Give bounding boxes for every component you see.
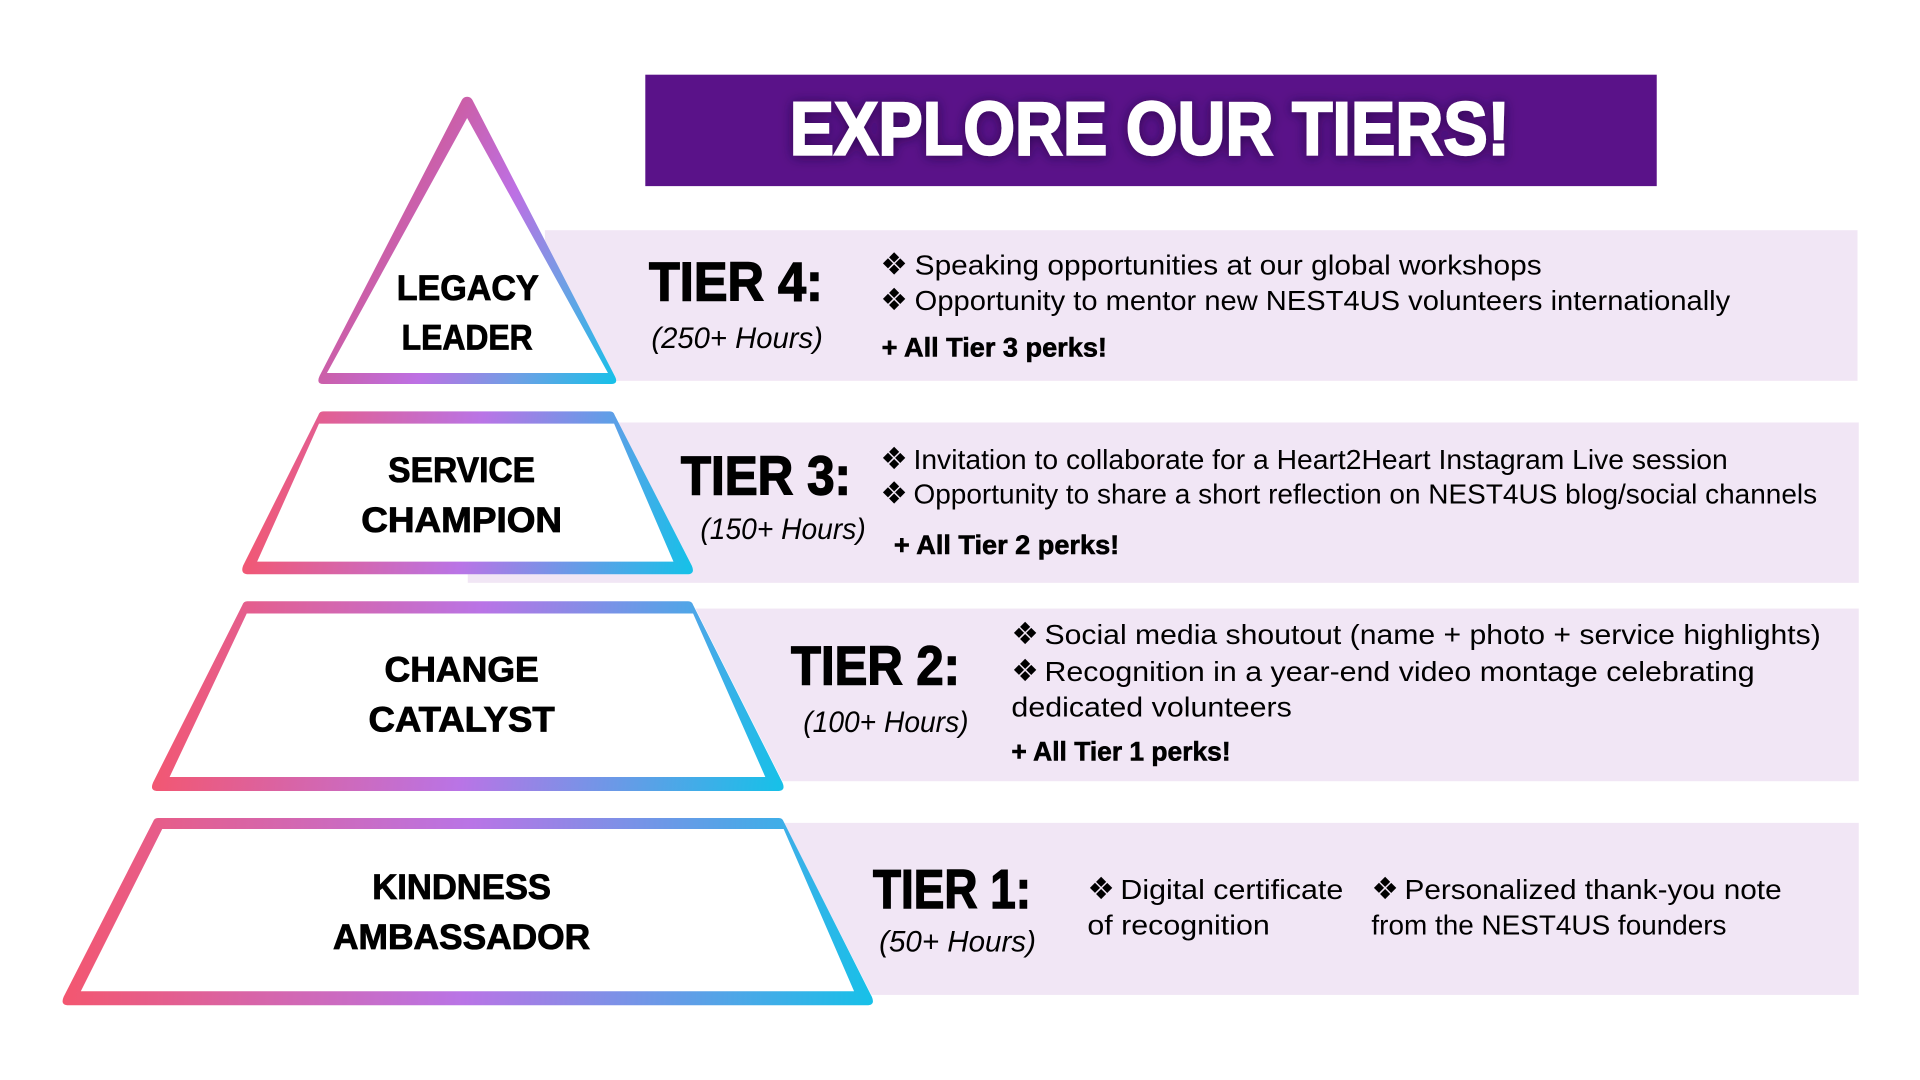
tier 1 perk 2: ❖ [1371, 872, 1399, 907]
name [397, 269, 539, 358]
tier 3 inherited perks: + All Tier 2 perks! [894, 530, 1119, 560]
tier 2 heading: TIER 2: [791, 634, 960, 696]
tier 3 perk 1: ❖ [880, 442, 908, 477]
tier 1 perk 1 [1087, 872, 1343, 940]
tier 4 perk 1: ❖ [880, 247, 908, 282]
tier 3 hours: (150+ Hours) [700, 513, 866, 546]
tier 1 perk 1: ❖ [1087, 872, 1115, 907]
tier 4 hours: (250+ Hours) [651, 322, 823, 355]
panel: tier 2 [686, 609, 1859, 781]
tier 2 hours: (100+ Hours) [803, 706, 969, 739]
panel: tier 3 [468, 422, 1859, 583]
name: CATALYST [369, 701, 555, 740]
name: CHAMPION [361, 501, 562, 540]
name: LEGACY [397, 269, 539, 308]
name: KINDNESS [372, 868, 551, 907]
name: LEADER [402, 319, 533, 358]
tier 2 perk 1: ❖ [1011, 617, 1039, 652]
tier 1 heading: TIER 1: [873, 858, 1031, 920]
name [333, 868, 590, 957]
name: SERVICE [388, 451, 535, 490]
pyramid level: Legacy Leader [318, 97, 616, 384]
tier 1 perk 2: from the NEST4US founders [1371, 909, 1727, 940]
tier 1 hours: (50+ Hours) [879, 925, 1036, 958]
name: CHANGE [384, 650, 539, 689]
name [361, 451, 562, 540]
tier 3 heading: TIER 3: [681, 445, 851, 507]
tier 4 perk 1: Speaking opportunities at our global workshops [915, 249, 1542, 280]
tier 3 perk 2: Opportunity to share a short reflection on NEST4US blog/social channels [913, 478, 1817, 509]
tier 4 inherited perks: + All Tier 3 perks! [882, 332, 1107, 362]
tier 4 perk 2: ❖ [880, 283, 908, 318]
pyramid level: Kindness Ambassador [63, 818, 873, 1005]
tier 3 perk 2: ❖ [880, 476, 908, 511]
tier 2 perk 1: Social media shoutout (name + photo + service highlights) [1044, 619, 1821, 650]
tier 3 perk 1: Invitation to collaborate for a Heart2Heart Instagram Live session [913, 444, 1728, 475]
name [369, 650, 555, 740]
tier 4 perk 2: Opportunity to mentor new NEST4US volunteers internationally [915, 285, 1731, 316]
tier 1 perk 2 [1371, 872, 1782, 940]
pyramid level: Change Catalyst [152, 601, 784, 791]
tier 2 perk 2 [1011, 654, 1755, 722]
pyramid level: Service Champion [242, 411, 693, 574]
tier 1 perk 2: Personalized thank-you note [1404, 874, 1782, 905]
title banner [645, 75, 1657, 186]
tier 2 perk 2: Recognition in a year-end video montage celebrating [1044, 656, 1755, 687]
panel: tier 1 [784, 823, 1859, 995]
tier 2 inherited perks: + All Tier 1 perks! [1011, 736, 1231, 766]
tier 1 perk 1: Digital certificate [1120, 874, 1343, 905]
tier 2 perk 2: ❖ [1011, 654, 1039, 689]
tier 1 perk 1: of recognition [1087, 909, 1270, 940]
panel: tier 4 [545, 230, 1858, 381]
name: AMBASSADOR [333, 918, 590, 957]
tier 2 perk 2: dedicated volunteers [1011, 691, 1292, 722]
title: EXPLORE OUR TIERS! [790, 86, 1510, 170]
tier 4 heading: TIER 4: [649, 251, 823, 313]
